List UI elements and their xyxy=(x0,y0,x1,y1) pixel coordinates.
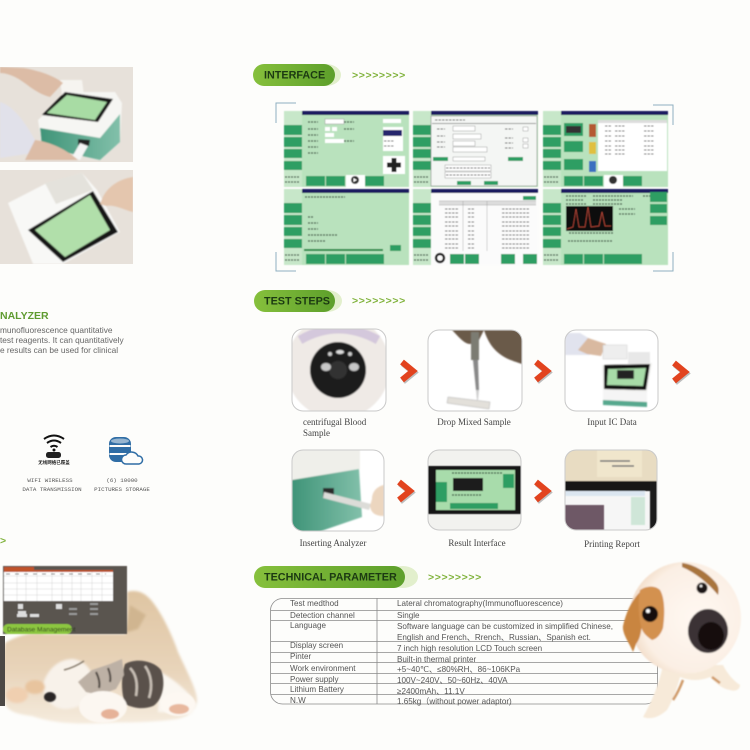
step 1 caption: centrifugal Blood xyxy=(303,417,367,427)
screen: settings dialog xyxy=(413,111,538,187)
chevron fragment: > xyxy=(0,535,7,547)
table: technical parameters: Software language can be customized in simplified Chinese, xyxy=(397,622,613,631)
table: technical parameters: Power supply xyxy=(290,675,340,684)
section header: test steps xyxy=(254,290,406,312)
product description: test reagents. It can quantitatively xyxy=(0,335,124,345)
database management label: Database Management xyxy=(7,626,76,634)
database management panel xyxy=(3,566,127,634)
icon: wifi wireless xyxy=(38,436,70,466)
corner brackets xyxy=(276,103,673,271)
step 1 caption: Sample xyxy=(303,428,330,438)
section header: interface: >>>>>>>> xyxy=(352,70,406,82)
section header: test steps: >>>>>>>> xyxy=(352,295,406,307)
photo: technician inserting test strip xyxy=(0,67,133,162)
step 3: input IC data xyxy=(565,330,658,427)
table: technical parameters: ≥2400mAh、11.1V xyxy=(397,687,465,696)
step 3 caption: Input IC Data xyxy=(587,417,637,427)
table: technical parameters: N.W xyxy=(290,696,306,705)
table: technical parameters: Display screen xyxy=(290,641,343,650)
step 1 caption xyxy=(303,417,367,438)
icon: wifi wireless: 无线网络已覆盖 xyxy=(38,459,70,466)
table: technical parameters: English and French、Rrench、Russian、Spanish ect. xyxy=(397,633,591,642)
table: technical parameters: 7 inch high resolution LCD Touch screen xyxy=(397,644,542,653)
product description: e results can be used for clinical xyxy=(0,345,118,355)
step 4: inserting analyzer xyxy=(292,450,384,548)
photo: finger touching the screen xyxy=(0,170,133,264)
section header: interface xyxy=(253,64,406,86)
feature captions: (6) 10000 xyxy=(106,477,138,484)
step 5 caption: Result Interface xyxy=(448,538,506,548)
table: technical parameters xyxy=(270,598,658,706)
arrow: step 3 onward xyxy=(674,363,686,382)
table: technical parameters: Single xyxy=(397,611,420,620)
table: technical parameters: Built-in thermal printer xyxy=(397,655,476,664)
table: technical parameters: Work environment xyxy=(290,664,356,673)
side strip xyxy=(0,636,5,706)
feature captions: DATA TRANSMISSION xyxy=(22,486,82,493)
table: technical parameters: Detection channel xyxy=(290,611,355,620)
step 6 caption: Printing Report xyxy=(584,539,640,549)
step 2 caption: Drop Mixed Sample xyxy=(437,417,511,427)
step 6: printing report xyxy=(565,450,657,549)
product description xyxy=(0,325,124,355)
table: technical parameters: Lateral chromatography(Immunofluorescence) xyxy=(397,599,563,608)
arrow: step 4 to 5 xyxy=(399,482,411,502)
table: technical parameters: +5~40℃、≤80%RH、86~106KPa xyxy=(397,665,521,674)
table: technical parameters: Language xyxy=(290,621,327,630)
screen: record table xyxy=(413,189,538,265)
step 2: drop mixed sample xyxy=(428,330,522,427)
feature captions: WIFI WIRELESS xyxy=(27,477,73,484)
photo: sleeping dog and kitten xyxy=(2,591,197,724)
section header: technical parameter: TECHNICAL PARAMETER xyxy=(264,572,397,584)
feature captions xyxy=(22,477,150,493)
screen: test item list xyxy=(543,111,668,187)
table: technical parameters: Pinter xyxy=(290,652,311,661)
product description: munofluorescence quantitative xyxy=(0,325,113,335)
section header: interface: INTERFACE xyxy=(264,70,325,82)
step 4 caption: Inserting Analyzer xyxy=(300,538,366,548)
icon: database with cloud xyxy=(109,437,143,464)
screen: test progress xyxy=(284,189,409,265)
interface screens xyxy=(284,111,668,265)
table: technical parameters: 1.65kg（without power adaptor) xyxy=(397,697,512,706)
table: technical parameters: Lithium Battery xyxy=(290,685,345,694)
step 5: result interface xyxy=(428,450,521,548)
arrow: step 1 to 2 xyxy=(402,362,414,382)
feature captions: PICTURES STORAGE xyxy=(94,486,150,493)
screen: test input form xyxy=(284,111,409,187)
step 1: centrifugal blood sample xyxy=(292,328,386,438)
screen: result chart xyxy=(543,189,668,265)
table: technical parameters: Test medthod xyxy=(290,599,339,608)
arrow: step 5 to 6 xyxy=(536,482,548,502)
section header: technical parameter: >>>>>>>> xyxy=(428,572,482,584)
photo: puppy xyxy=(623,562,741,718)
product heading: NALYZER xyxy=(0,310,49,322)
section header: technical parameter xyxy=(254,566,482,588)
arrow: step 2 to 3 xyxy=(536,362,548,382)
section header: test steps: TEST STEPS xyxy=(264,296,330,308)
table: technical parameters: 100V~240V、50~60Hz、40VA xyxy=(397,676,508,685)
